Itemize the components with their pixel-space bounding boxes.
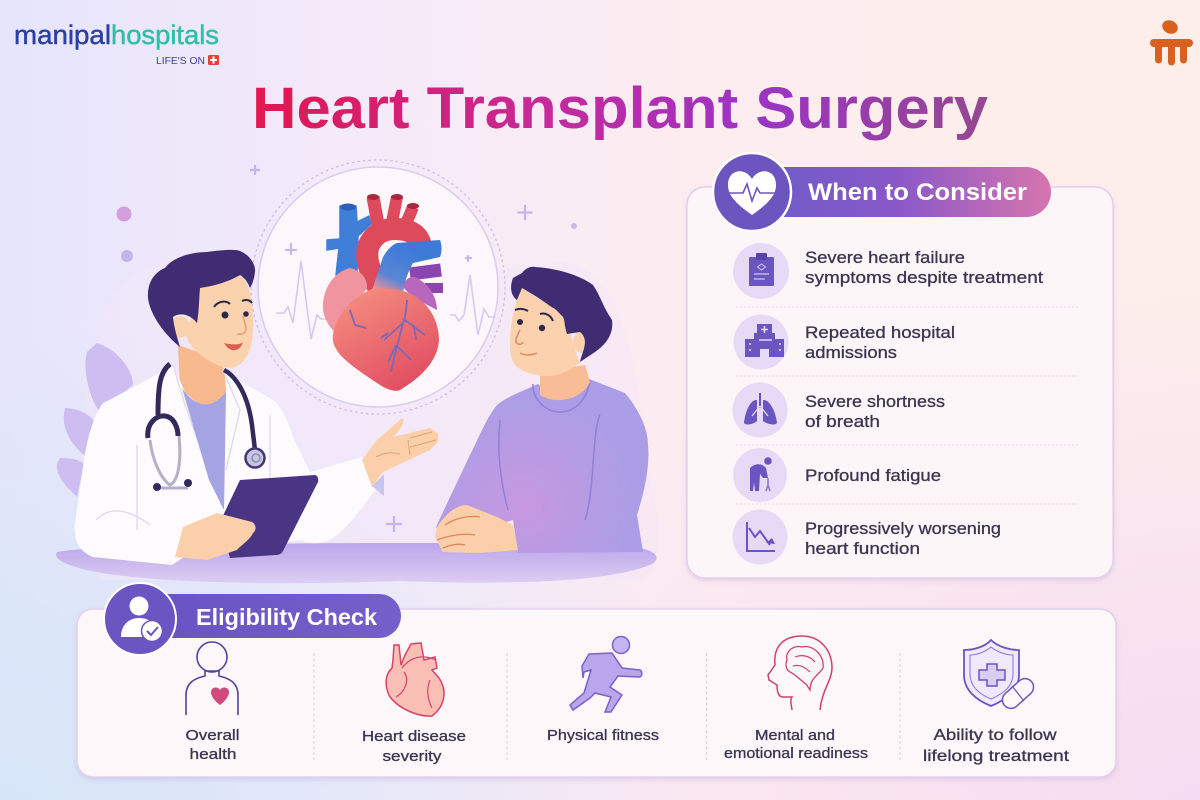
- decorative dots and sparkles: [116, 165, 577, 532]
- sweater: [436, 377, 648, 553]
- item: mental and emotional readiness: emotional readiness: [724, 745, 868, 762]
- item: progressively worsening heart function: [732, 510, 1001, 564]
- item: repeated hospital admissions: [734, 314, 955, 370]
- item: overall health: health: [190, 746, 236, 763]
- manipal hospitals logo: [14, 20, 219, 67]
- doctor: [75, 250, 438, 565]
- tablet: [220, 475, 318, 558]
- superior vena cava: [327, 206, 371, 275]
- panel: when to consider: [687, 153, 1113, 578]
- pulmonary artery: [372, 240, 442, 294]
- holding hand: [175, 513, 256, 560]
- item: repeated hospital admissions: admissions: [805, 343, 897, 362]
- brand mark: orange emblem: [1150, 18, 1193, 66]
- item: heart disease severity: [362, 643, 466, 765]
- item: mental and emotional readiness: Mental and: [755, 727, 835, 744]
- title: Heart Transplant Surgery: [252, 76, 988, 141]
- stethoscope: [148, 364, 264, 491]
- neck: [540, 365, 590, 400]
- ventricle: [333, 288, 439, 391]
- heading pill: eligibility check: [104, 583, 401, 655]
- manipal hospitals logo: manipal: [14, 20, 111, 50]
- head: [186, 275, 253, 368]
- heading pill: when to consider: [713, 153, 1051, 231]
- raised hand: [362, 418, 438, 487]
- lab coat: [75, 365, 384, 565]
- heading pill: eligibility check: Eligibility Check: [196, 604, 377, 630]
- face details: [515, 309, 553, 355]
- item: severe shortness of breath: Severe shortness: [805, 392, 945, 411]
- table: [56, 543, 657, 583]
- item: repeated hospital admissions: Repeated hospital: [805, 323, 955, 342]
- item: severe shortness of breath: [732, 382, 945, 438]
- clasped hands: [435, 505, 518, 553]
- illustration: doctor and patient consultation: [56, 160, 659, 583]
- item: physical fitness: [547, 636, 659, 744]
- aorta and branches: [367, 194, 421, 287]
- hair: [148, 250, 255, 347]
- patient: [435, 267, 648, 553]
- item: ability to follow lifelong treatment: lifelong treatment: [923, 748, 1070, 765]
- item: profound fatigue: Profound fatigue: [805, 466, 941, 485]
- item: ability to follow lifelong treatment: [923, 640, 1070, 765]
- left atrium pink: [323, 268, 367, 332]
- leaves: [57, 343, 133, 497]
- neck: [178, 345, 228, 410]
- item: ability to follow lifelong treatment: Ability to follow: [934, 727, 1057, 744]
- item: severe heart failure: Severe heart failure: [805, 248, 965, 267]
- pulmonary veins: [410, 270, 441, 274]
- item: severe heart failure: [733, 243, 1043, 299]
- manipal hospitals logo: hospitals: [111, 20, 219, 50]
- item: physical fitness: Physical fitness: [547, 727, 659, 744]
- ear: [170, 316, 190, 338]
- item: overall health: [186, 642, 240, 763]
- hair: [511, 267, 612, 362]
- item: mental and emotional readiness: [724, 636, 868, 762]
- heading pill: when to consider: When to Consider: [808, 179, 1027, 206]
- item: severe shortness of breath: of breath: [805, 412, 880, 431]
- soft background blob: [82, 251, 659, 580]
- ear: [573, 331, 591, 353]
- item: severe heart failure: symptoms despite treatment: [805, 268, 1043, 287]
- item: overall health: Overall: [186, 727, 240, 744]
- item: progressively worsening heart function: heart function: [805, 539, 920, 558]
- head: [510, 288, 580, 376]
- item: profound fatigue: [733, 448, 941, 502]
- item: heart disease severity: Heart disease: [362, 728, 466, 745]
- heart circle: [251, 160, 505, 414]
- face details: [214, 300, 252, 350]
- item: heart disease severity: severity: [382, 748, 442, 765]
- right atrium purple: [403, 277, 437, 310]
- anatomical heart: [323, 194, 443, 391]
- coronary vessels: [350, 300, 425, 372]
- t-shirt: [182, 388, 226, 510]
- item: progressively worsening heart function: Progressively worsening: [805, 519, 1001, 538]
- panel: eligibility check: [77, 583, 1116, 777]
- manipal hospitals logo: LIFE'S ON: [156, 56, 205, 67]
